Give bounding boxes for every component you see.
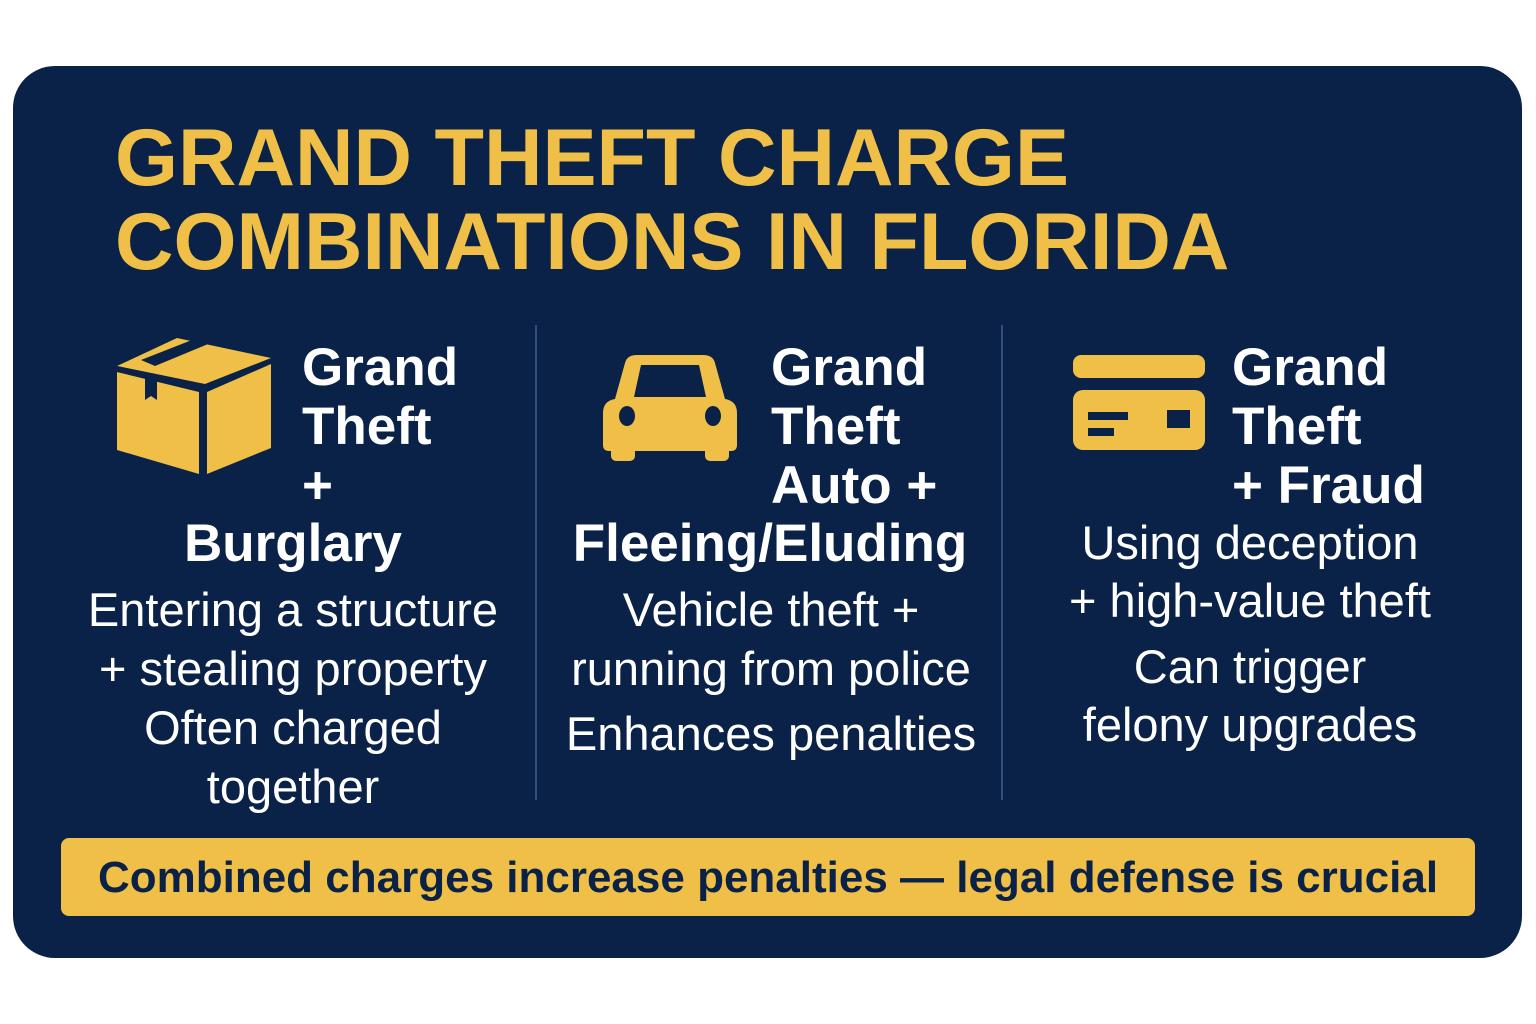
- description: [88, 583, 498, 813]
- heading: Auto +: [771, 456, 937, 515]
- heading: Grand: [302, 338, 458, 397]
- description: Vehicle theft +: [623, 583, 919, 636]
- description: together: [207, 760, 379, 813]
- callout: bottom banner: [61, 838, 1475, 916]
- panel: auto: Fleeing/Eluding: [573, 514, 967, 573]
- panel: fraud: [1069, 338, 1431, 751]
- description: [1069, 516, 1431, 627]
- heading: [302, 338, 458, 515]
- heading: Theft: [302, 397, 432, 456]
- description: Often charged: [144, 701, 442, 754]
- heading: Grand: [771, 338, 927, 397]
- description: running from police: [571, 642, 971, 695]
- heading: Theft: [771, 397, 901, 456]
- icon: credit card: [1073, 355, 1205, 450]
- panel: burglary: Burglary: [184, 514, 402, 573]
- title: [115, 113, 1229, 287]
- heading: Grand: [1232, 338, 1388, 397]
- panel: auto: [566, 338, 976, 760]
- icon: car: [603, 355, 737, 461]
- description: [571, 583, 971, 695]
- heading: +: [302, 456, 333, 515]
- panel: fraud: felony upgrades: [1083, 698, 1417, 751]
- callout: bottom banner: Combined charges increase penalties — legal defense is crucial: [98, 853, 1438, 902]
- title: COMBINATIONS IN FLORIDA: [115, 197, 1229, 287]
- panel: fraud: Can trigger: [1134, 640, 1366, 693]
- icon: box: [117, 338, 271, 474]
- heading: Theft: [1232, 397, 1362, 456]
- panel: auto: Enhances penalties: [566, 707, 976, 760]
- description: Entering a structure: [88, 583, 498, 636]
- heading: [771, 338, 937, 515]
- description: Using deception: [1081, 516, 1419, 569]
- description: + stealing property: [99, 642, 487, 695]
- title: GRAND THEFT CHARGE: [115, 113, 1069, 203]
- heading: [1232, 338, 1425, 515]
- panel: burglary: [88, 338, 498, 813]
- description: + high-value theft: [1069, 574, 1431, 627]
- heading: + Fraud: [1232, 456, 1425, 515]
